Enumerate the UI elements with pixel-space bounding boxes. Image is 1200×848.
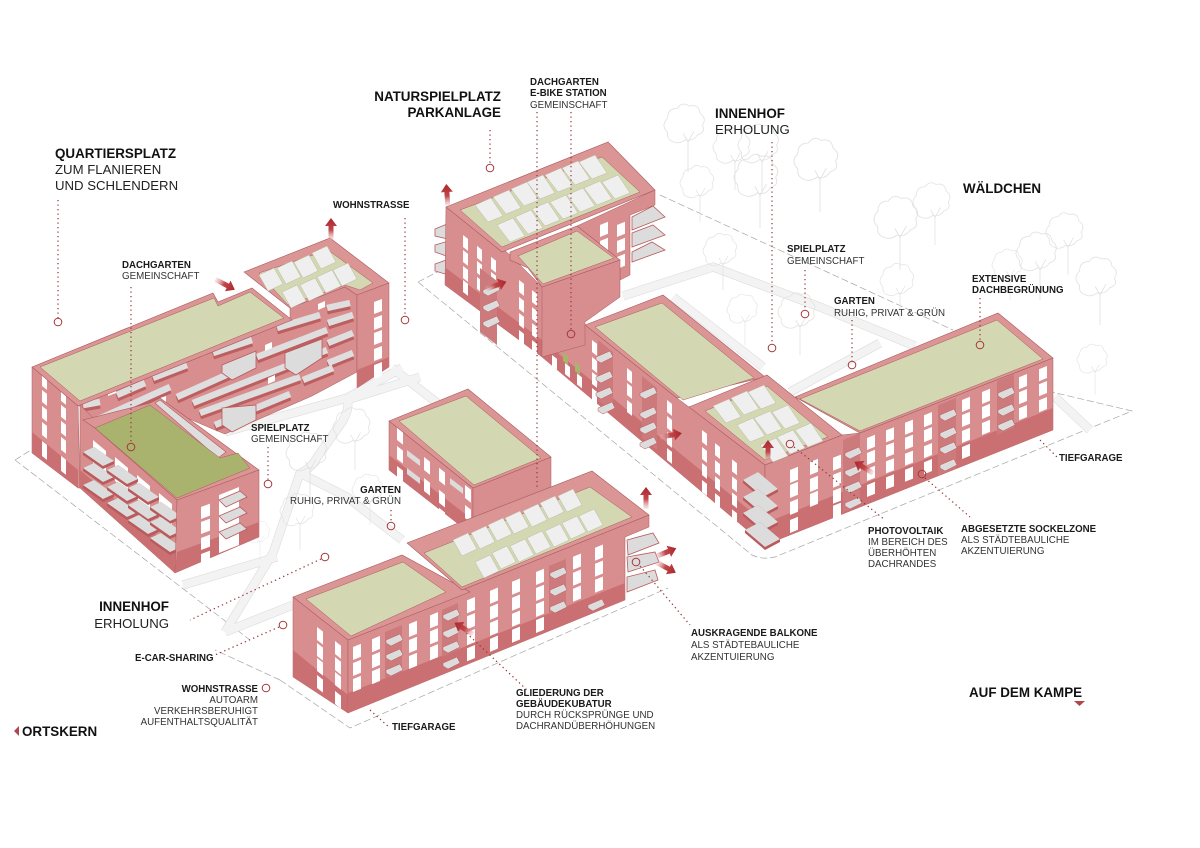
callout markers [54,164,984,692]
label: Dachgarten left: GEMEINSCHAFT [122,271,200,282]
site boundary dashed lines [15,195,1132,728]
label: Dachgarten e-bike: E-BIKE STATION [530,88,607,99]
label: Wohnstrasse south: VERKEHRSBERUHIGT [154,706,258,717]
rear wing [577,190,665,280]
south facades [293,515,649,713]
middle roof [585,295,765,400]
label: Auskragende Balkone: ALS STÄDTEBAULICHE [691,640,800,651]
label: Photovoltaik: PHOTOVOLTAIK [868,526,943,537]
low roof [293,555,470,640]
label: Innenhof south: ERHOLUNG [94,616,169,631]
label: Dachgarten e-bike: GEMEINSCHAFT [530,100,608,111]
trees [246,104,1116,560]
north roof with solar panels [446,142,655,252]
corner balconies [743,472,780,550]
label: Photovoltaik: DACHRANDES [868,559,937,570]
red arrows [213,184,876,639]
background ground plan [15,104,1132,728]
label: Gliederung: GLIEDERUNG DER [516,688,604,699]
label: Tiefgarage east: TIEFGARAGE [1059,453,1123,464]
label: Auskragende Balkone: AKZENTUIERUNG [691,652,774,663]
building: south block [293,471,659,713]
label: Spielplatz west: GEMEINSCHAFT [251,434,329,445]
label: Ortskern: ORTSKERN [22,724,97,739]
label: Dachgarten left: DACHGARTEN [122,260,191,271]
south wing [80,398,259,573]
upper block with solar panels [244,238,389,388]
label: Quartiersplatz: QUARTIERSPLATZ [55,146,176,161]
label: Innenhof south: INNENHOF [99,599,169,614]
label: Garten west: GARTEN [360,485,401,496]
high roof with solar panels [407,471,649,590]
label: Auf dem Kampe [969,685,1085,706]
tower [510,226,620,357]
label: Extensive Dachbegrünung: EXTENSIVE [972,274,1027,285]
roof garden green [32,288,292,406]
label: Gliederung: DACHRANDÜBERHÖHUNGEN [516,721,655,732]
label: Wohnstrasse south: WOHNSTRASSE [182,684,259,695]
label: Abgesetzte Sockelzone: AKZENTUIERUNG [961,546,1044,557]
label: Quartiersplatz: ZUM FLANIEREN [55,162,161,177]
label: Auf dem Kampe: AUF DEM KAMPE [969,685,1082,700]
label: Gliederung: DURCH RÜCKSPRÜNGE UND [516,710,654,721]
label: Abgesetzte Sockelzone: ABGESETZTE SOCKELZONE [961,524,1097,535]
path network [183,267,1090,632]
label: Wohnstrasse south: AUFENTHALTSQUALITÄT [141,717,258,728]
label: Abgesetzte Sockelzone: ALS STÄDTEBAULICHE [961,535,1070,546]
label: Wäldchen: WÄLDCHEN [963,181,1041,196]
label: Auskragende Balkone: AUSKRAGENDE BALKONE [691,628,818,639]
label: Photovoltaik: IM BEREICH DES [868,537,948,548]
label: Tiefgarage south: TIEFGARAGE [392,722,456,733]
courtyard galleries [78,285,357,434]
building: central block [389,389,551,550]
label: Wohnstrasse south: AUTOARM [209,695,258,706]
corner roof with solar panels [689,375,842,465]
label: Extensive Dachbegrünung: DACHBEGRÜNUNG [972,285,1064,296]
label: Gliederung: GEBÄUDEKUBATUR [516,699,612,710]
label: Spielplatz east: GEMEINSCHAFT [787,256,865,267]
label: Garten west: RUHIG, PRIVAT & GRÜN [290,496,401,507]
label: Photovoltaik: ÜBERHÖHTEN [868,548,936,559]
label: Garten east: RUHIG, PRIVAT & GRÜN [834,308,945,319]
label: Innenhof north: INNENHOF [715,106,785,121]
building: upper left L-block [32,238,389,573]
callout leader lines [58,112,1058,728]
label: Wohnstrasse top: WOHNSTRASSE [333,200,410,211]
label: Naturspielplatz: NATURSPIELPLATZ [374,89,501,104]
label: Garten east: GARTEN [834,296,875,307]
label: Quartiersplatz: UND SCHLENDERN [55,178,178,193]
label: Naturspielplatz: PARKANLAGE [408,105,501,120]
balconies east end [627,533,659,592]
east long wing [765,313,1053,545]
building: north-east complex [435,142,1053,550]
label: Spielplatz west: SPIELPLATZ [251,423,310,434]
label: Innenhof north: ERHOLUNG [715,122,790,137]
long south-west facade [435,207,765,545]
west facade [32,367,80,488]
label: Spielplatz east: SPIELPLATZ [787,244,846,255]
label: Dachgarten e-bike: DACHGARTEN [530,77,599,88]
labels [14,77,1123,739]
label: E-Car-Sharing: E-CAR-SHARING [135,653,214,664]
